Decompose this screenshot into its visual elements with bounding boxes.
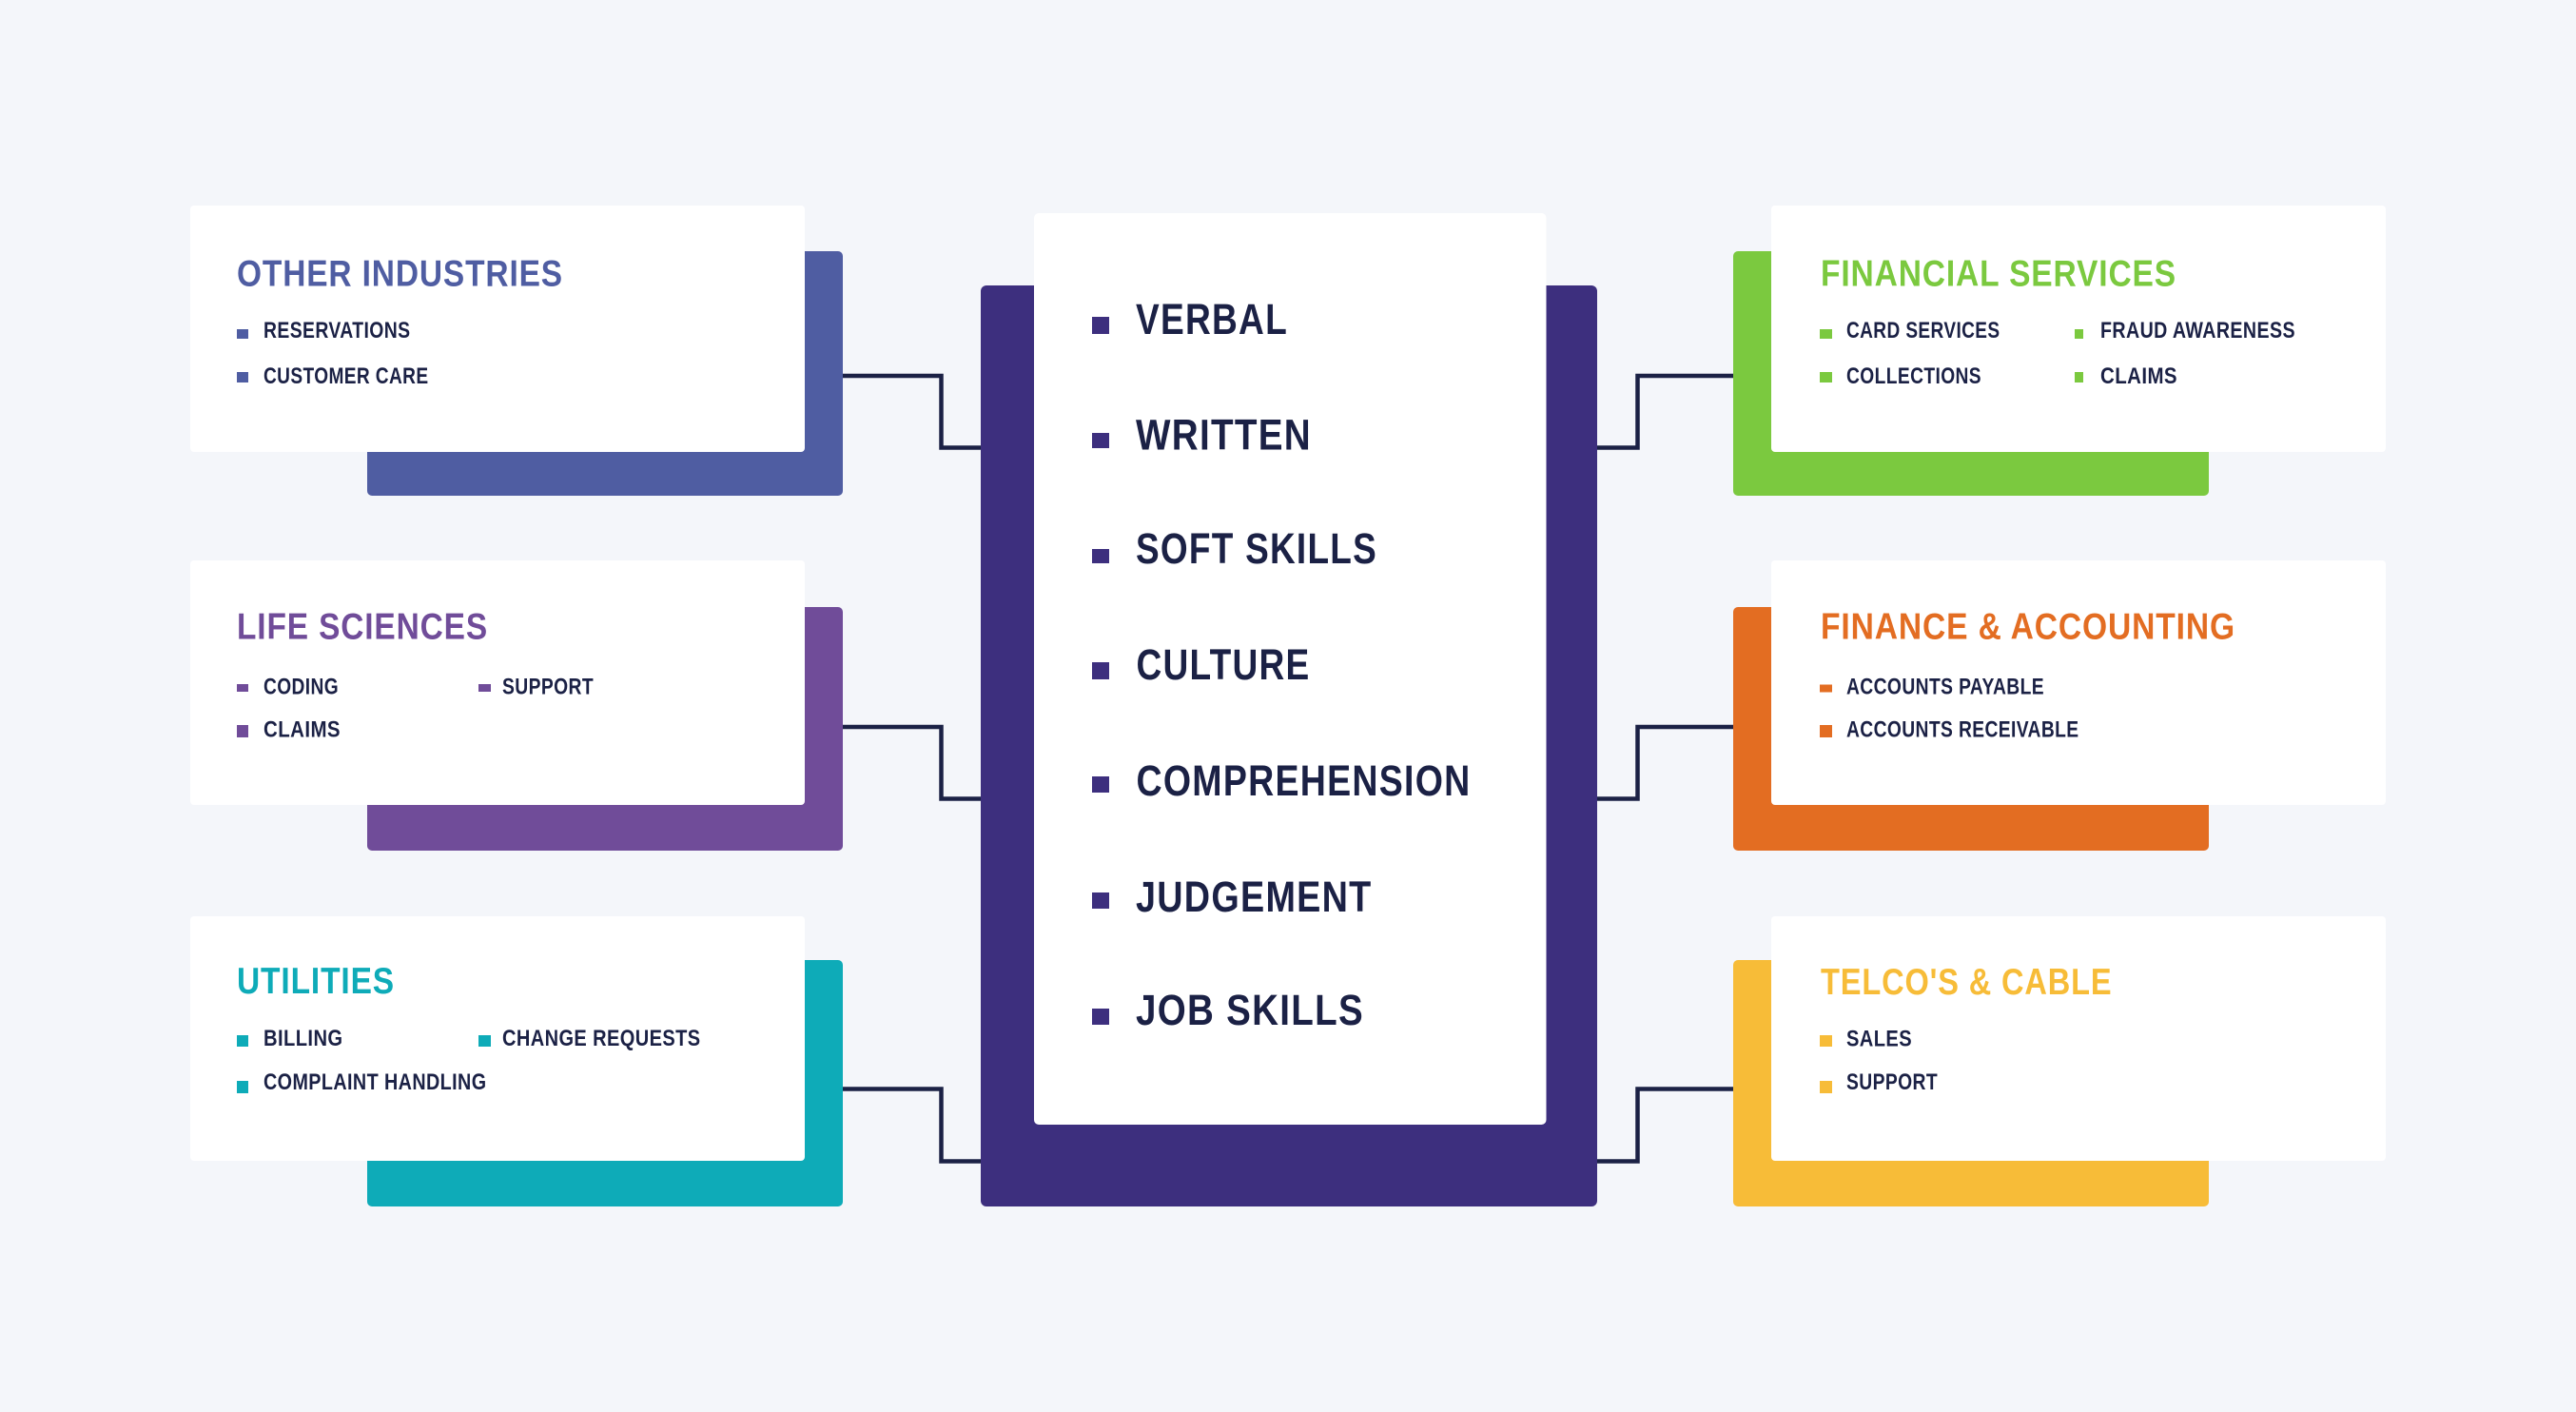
backing block: [367, 607, 843, 851]
item: support: SUPPORT: [1846, 1069, 1938, 1095]
item: complaint handling: COMPLAINT HANDLING: [263, 1069, 487, 1095]
item: support: [478, 674, 594, 700]
skill: comprehension: COMPREHENSION: [1136, 756, 1471, 805]
item: claims: [2075, 363, 2177, 389]
heading: FINANCE & ACCOUNTING: [1821, 607, 2235, 647]
backing block: [1733, 607, 2209, 851]
skill: culture: CULTURE: [1136, 640, 1311, 689]
item: accounts payable: ACCOUNTS PAYABLE: [1846, 674, 2044, 700]
panel: finance and accounting: [1733, 560, 2386, 851]
item: claims: CLAIMS: [263, 717, 341, 742]
panel: utilities: [190, 916, 843, 1206]
item: sales: SALES: [1846, 1026, 1912, 1052]
item: customer care: CUSTOMER CARE: [263, 363, 428, 389]
connector: finance and accounting to center: [1596, 727, 1734, 799]
heading: LIFE SCIENCES: [237, 607, 488, 647]
backing block: [367, 251, 843, 496]
item: collections: [1820, 363, 1981, 389]
backing block: [367, 960, 843, 1206]
item: claims: [237, 717, 341, 742]
connector: telcos and cable to center: [1596, 1088, 1734, 1161]
item: coding: [237, 674, 339, 700]
panel: financial services: [1733, 206, 2386, 496]
panel: other industries: [190, 206, 843, 496]
item: fraud awareness: FRAUD AWARENESS: [2100, 318, 2295, 343]
item: sales: [1820, 1026, 1912, 1052]
center backing block: [981, 285, 1597, 1206]
white card: [1771, 916, 2386, 1161]
skill: verbal: [1092, 295, 1288, 343]
item: collections: COLLECTIONS: [1846, 363, 1981, 389]
skill: culture: [1092, 640, 1311, 689]
heading: TELCO'S & CABLE: [1821, 962, 2112, 1003]
skill: job skills: JOB SKILLS: [1136, 986, 1364, 1034]
white card: [190, 916, 805, 1161]
item: billing: BILLING: [263, 1026, 342, 1051]
white card: [1771, 560, 2386, 805]
item: change requests: CHANGE REQUESTS: [502, 1026, 700, 1051]
item: accounts receivable: ACCOUNTS RECEIVABLE: [1846, 717, 2079, 742]
heading: UTILITIES: [237, 961, 395, 1002]
item: coding: CODING: [263, 674, 339, 700]
backing block: [1733, 251, 2209, 496]
panel: center skills: [981, 213, 1597, 1206]
item: reservations: RESERVATIONS: [263, 318, 411, 343]
connector: utilities to center: [842, 1088, 982, 1161]
panel: telcos and cable: [1733, 916, 2386, 1206]
item: claims: CLAIMS: [2100, 363, 2177, 389]
item: billing: [237, 1026, 342, 1051]
skill: judgement: JUDGEMENT: [1136, 873, 1372, 921]
skill: verbal: VERBAL: [1136, 295, 1288, 343]
center white card: [1034, 213, 1547, 1125]
item: card services: CARD SERVICES: [1846, 318, 2000, 343]
skill: soft skills: SOFT SKILLS: [1136, 524, 1377, 573]
item: support: [1820, 1069, 1938, 1095]
item: card services: [1820, 318, 2000, 343]
item: support: SUPPORT: [502, 674, 594, 700]
connector: financial services to center: [1596, 376, 1734, 447]
white card: [190, 206, 805, 452]
connector: life sciences to center: [842, 727, 982, 799]
white card: [190, 560, 805, 805]
skill: written: WRITTEN: [1136, 411, 1312, 459]
panel: life sciences: [190, 560, 843, 851]
white card: [1771, 206, 2386, 452]
heading: FINANCIAL SERVICES: [1821, 253, 2176, 295]
heading: OTHER INDUSTRIES: [237, 253, 563, 295]
connector: other industries to center: [842, 376, 982, 447]
backing block: [1733, 960, 2209, 1206]
